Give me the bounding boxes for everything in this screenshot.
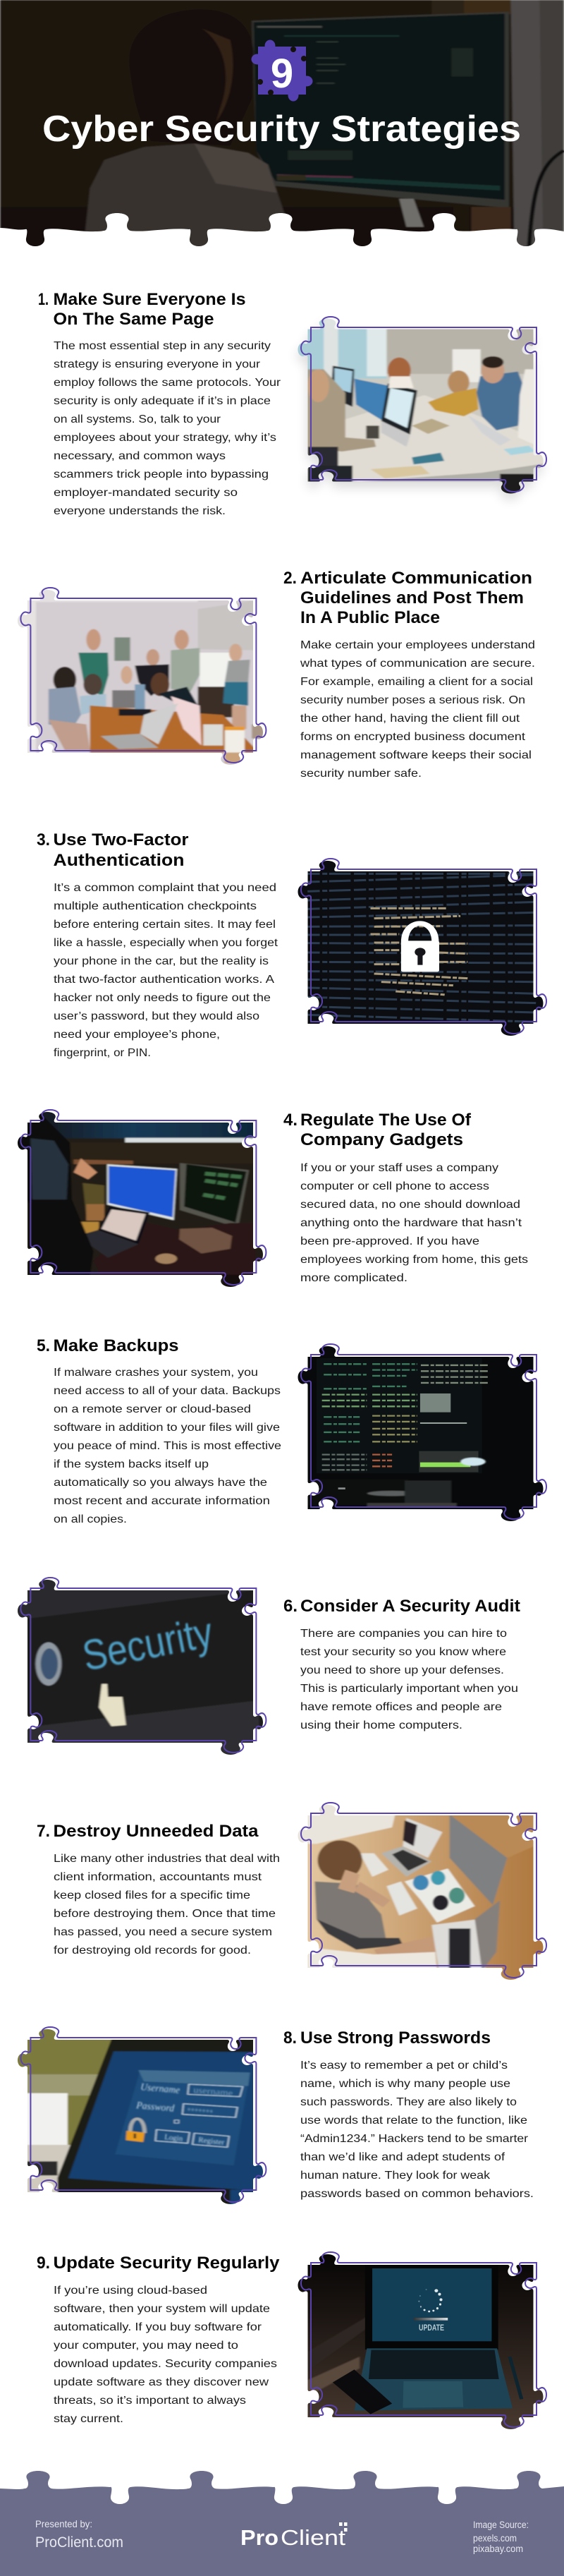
body text 4: computer or cell phone to access [300, 1180, 489, 1192]
image source: Image Source: [473, 2520, 529, 2530]
heading 3: Use Two-Factor [54, 830, 189, 849]
heading 6: 6. [283, 1597, 298, 1616]
body text 5: If malware crashes your system, you [54, 1367, 258, 1379]
heading 1: 1. [38, 290, 49, 309]
body text 4: If you or your staff uses a company [300, 1162, 498, 1174]
photo frame 7 [301, 1803, 546, 1978]
photo 7: man working at desk from above [298, 1805, 543, 1980]
section 3 [37, 830, 554, 1059]
body text 8: “Admin1234.” Hackers tend to be smarter [300, 2133, 529, 2145]
body text 1: necessary, and common ways [54, 450, 226, 462]
header torn puzzle edge [0, 213, 564, 282]
login form labels: Register [198, 2136, 225, 2147]
photo 8: tablet login screen [18, 2029, 263, 2204]
body text 7: keep closed files for a specific time [54, 1889, 250, 1901]
body text 2: Make certain your employees understand [300, 639, 535, 651]
body text 3: before entering certain sites. It may feel [54, 919, 276, 931]
heading 2: In A Public Place [300, 608, 440, 627]
body text 7: Like many other industries that deal with [54, 1853, 280, 1865]
photo 3: code with padlock [298, 861, 543, 1036]
heading 1 [38, 290, 245, 329]
body text 1 [54, 340, 281, 517]
badge: puzzle piece number: 9 [271, 51, 293, 97]
heading 8: Use Strong Passwords [300, 2028, 491, 2048]
photo frame 1 [301, 317, 546, 492]
body text 9: stay current. [54, 2413, 123, 2425]
body text 3: that two-factor authentication works. A [54, 974, 274, 986]
section 4 [14, 1106, 528, 1293]
body text 8: passwords based on common behaviors. [300, 2188, 534, 2200]
body text 1: employer-mandated security so [54, 487, 238, 499]
heading 2: Guidelines and Post Them [300, 588, 524, 607]
body text 3: It’s a common complaint that you need [54, 882, 276, 894]
body text 5: you peace of mind. This is most effective [54, 1440, 281, 1452]
body text 8: use words that relate to the function, like [300, 2115, 527, 2127]
header background photo [0, 0, 564, 254]
login form labels: username [193, 2084, 233, 2098]
body text 1: employees about your strategy, why it’s [54, 432, 276, 444]
body text 9: software, then your system will update [54, 2303, 270, 2315]
body text 3 [54, 882, 278, 1059]
photo frame 5 [301, 1344, 546, 1519]
photo frame 6 [20, 1578, 266, 1753]
header panel [0, 0, 564, 246]
body text 7 [54, 1853, 280, 1957]
body text 4: employees working from home, this gets [300, 1254, 528, 1266]
body text 7: client information, accountants must [54, 1871, 262, 1883]
body text 6: test your security so you know where [300, 1646, 506, 1658]
heading 3: Authentication [54, 851, 185, 870]
body text 2: forms on encrypted business document [300, 731, 526, 743]
photo 6: security on screen with hand cursor [18, 1580, 263, 1755]
body text 8: It’s easy to remember a pet or child’s [300, 2060, 508, 2072]
body text 1: scammers trick people into bypassing [54, 468, 269, 480]
heading 4 [283, 1111, 472, 1149]
body text 2: security number poses a serious risk. On [300, 694, 525, 706]
body text 2: For example, emailing a client for a social [300, 676, 533, 688]
body text 5: software in addition to your files will give [54, 1422, 280, 1434]
body text 8: name, which is why many people use [300, 2078, 510, 2090]
body text 2 [300, 639, 535, 780]
body text 4: secured data, no one should download [300, 1199, 520, 1211]
body text 5: if the system backs itself up [54, 1458, 209, 1470]
body text 5: most recent and accurate information [54, 1495, 270, 1507]
body text 8: such passwords. They are also likely to [300, 2096, 517, 2108]
heading 9: Update Security Regularly [54, 2254, 280, 2273]
body text 8: than we’d like and adept students of [300, 2151, 505, 2163]
body text 1: The most essential step in any security [54, 340, 271, 352]
heading 6: Consider A Security Audit [300, 1597, 520, 1616]
body text 9: automatically. If you buy software for [54, 2321, 262, 2333]
body text 2: management software keeps their social [300, 749, 532, 761]
heading 7: 7. [37, 1822, 50, 1841]
body text 6: This is particularly important when you [300, 1683, 518, 1695]
body text 1: everyone understands the risk. [54, 505, 226, 517]
section 7 [37, 1797, 554, 1981]
body text 3: hacker not only needs to figure out the [54, 992, 271, 1004]
body text 5: need access to all of your data. Backups [54, 1385, 281, 1397]
login form labels: Username [140, 2082, 180, 2096]
image source: pixabay.com [473, 2544, 523, 2554]
title: Cyber Security Strategies [42, 109, 521, 150]
body text 7: for destroying old records for good. [54, 1945, 251, 1957]
photo 9: laptop showing update [298, 2254, 543, 2429]
body text 5: automatically so you always have the [54, 1477, 267, 1489]
photo frame 2 [20, 588, 266, 763]
heading 3 [37, 830, 189, 870]
body text 6: have remote offices and people are [300, 1701, 502, 1713]
body text 9: download updates. Security companies [54, 2358, 277, 2370]
body text 9: update software as they discover new [54, 2376, 269, 2388]
body text 3: fingerprint, or PIN. [54, 1047, 151, 1059]
ProClient logo: Client [281, 2525, 345, 2550]
body text 8: human nature. They look for weak [300, 2170, 491, 2182]
body text 4 [300, 1162, 528, 1284]
body text 9 [54, 2285, 277, 2425]
body text 6: using their home computers. [300, 1719, 462, 1731]
body text 6 [300, 1628, 518, 1731]
body text 3: need your employee’s phone, [54, 1029, 220, 1041]
heading 1: On The Same Page [54, 310, 214, 329]
heading 3: 3. [37, 830, 50, 849]
login form labels [135, 2082, 233, 2147]
body text 3: multiple authentication checkpoints [54, 900, 257, 912]
body text 3: like a hassle, especially when you forget [54, 937, 278, 949]
heading 8: 8. [283, 2028, 297, 2048]
image source [473, 2520, 529, 2554]
photo shadow 1 [298, 325, 543, 500]
body text 9: If you’re using cloud-based [54, 2285, 207, 2297]
heading 1: Make Sure Everyone Is [54, 290, 245, 309]
body text 6: you need to shore up your defenses. [300, 1664, 504, 1676]
body text 5: on a remote server or cloud-based [54, 1403, 251, 1415]
section 9 [37, 2246, 554, 2432]
body text 7: before destroying them. Once that time [54, 1908, 276, 1920]
image source: pexels.com [473, 2533, 517, 2544]
section 8 [14, 2023, 534, 2206]
body text 9: threats, so it’s important to always [54, 2395, 246, 2407]
body text 3: your phone in the car, but the reality is [54, 955, 269, 967]
presented by: ProClient.com [35, 2534, 123, 2551]
body text 5 [54, 1367, 281, 1525]
body text 1: employ follows the same protocols. Your [54, 377, 281, 389]
screen word: Security [79, 1609, 216, 1680]
laptop screen word: UPDATE [419, 2323, 444, 2333]
photo 4: person at glowing monitors [18, 1112, 263, 1287]
body text 3: user’s password, but they would also [54, 1010, 259, 1022]
heading 4: Regulate The Use Of [300, 1111, 472, 1130]
login form labels: Password [135, 2100, 176, 2115]
body text 1: security is only adequate if it’s in place [54, 395, 271, 407]
heading 5: 5. [37, 1336, 50, 1355]
footer panel [0, 2471, 564, 2576]
body text 2: security number safe. [300, 768, 422, 780]
heading 9: 9. [37, 2254, 50, 2273]
photo 1: office team at desks [298, 319, 543, 494]
footer puzzle edge background [0, 2471, 564, 2576]
section 2 [14, 569, 535, 780]
heading 7: Destroy Unneeded Data [54, 1822, 259, 1841]
photo frame 8 [20, 2027, 266, 2202]
heading 2 [283, 569, 532, 627]
body text 4: anything onto the hardware that hasn’t [300, 1217, 522, 1229]
ProClient logo [240, 2522, 347, 2550]
photo frame 4 [20, 1110, 266, 1285]
presented by: Presented by: [35, 2518, 92, 2529]
presented by [35, 2518, 123, 2551]
body text 1: strategy is ensuring everyone in your [54, 358, 261, 370]
photo 5: terminal dashboard screen [298, 1346, 543, 1521]
body text 8 [300, 2060, 534, 2200]
photo frame 3 [301, 859, 546, 1034]
body text 6: There are companies you can hire to [300, 1628, 507, 1640]
heading 5: Make Backups [54, 1336, 179, 1355]
body text 2: the other hand, having the client fill out [300, 713, 520, 725]
section 1 [38, 290, 554, 517]
badge: puzzle piece number [251, 40, 313, 102]
section 6 [14, 1571, 520, 1759]
photo 2: team around laptops [18, 590, 263, 765]
body text 7: has passed, you need a secure system [54, 1926, 272, 1938]
body text 4: more complicated. [300, 1272, 407, 1284]
heading 4: 4. [283, 1111, 298, 1130]
body text 1: on all systems. So, talk to your [54, 413, 221, 425]
body text 4: been pre-approved. If you have [300, 1235, 479, 1247]
login form labels: ******* [187, 2105, 214, 2117]
section 5 [37, 1336, 554, 1525]
body text 5: on all copies. [54, 1513, 127, 1525]
body text 2: what types of communication are secure. [300, 658, 535, 670]
ProClient logo: Pro [240, 2525, 278, 2550]
photo frame 9 [301, 2252, 546, 2427]
body text 9: your computer, you may need to [54, 2340, 238, 2352]
heading 4: Company Gadgets [300, 1130, 463, 1149]
heading 2: Articulate Communication [300, 569, 532, 588]
login form labels: Login [164, 2133, 183, 2143]
heading 2: 2. [283, 569, 297, 588]
